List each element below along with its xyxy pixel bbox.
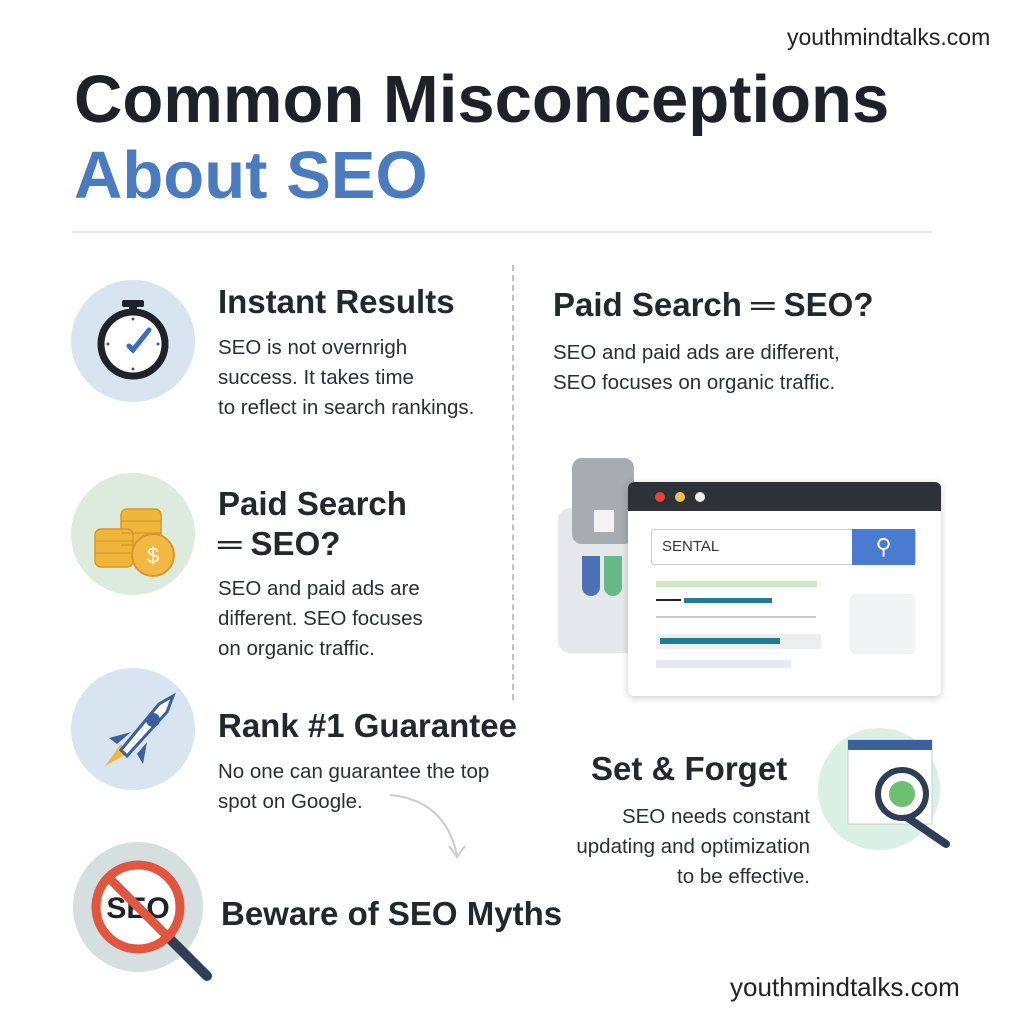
text: paid search left: Paid Search — [218, 485, 407, 522]
illustration: browser: SENTAL — [662, 538, 719, 555]
text: paid search right: SEO focuses on organic traffic. — [553, 371, 835, 394]
text: instant results: to reflect in search rankings. — [218, 396, 474, 419]
text: paid search left: ═ SEO? — [218, 525, 340, 562]
icon: magnifier gear — [818, 728, 940, 850]
illustration: browser — [558, 458, 944, 702]
title: Common Misconceptions — [74, 62, 889, 137]
brand bottom: youthmindtalks.com — [730, 972, 960, 1002]
text: instant results — [218, 283, 474, 419]
icon: rocket — [71, 668, 195, 790]
heading: beware: Beware of SEO Myths — [221, 895, 562, 932]
text: paid search right — [553, 286, 874, 394]
text: instant results: success. It takes time — [218, 366, 414, 389]
text: set & forget — [576, 750, 810, 888]
icon: no SEO: SEO — [106, 892, 170, 925]
text: rank guarantee — [218, 707, 517, 813]
text: rank guarantee: spot on Google. — [218, 790, 363, 813]
text: rank guarantee: No one can guarantee the top — [218, 760, 489, 783]
text: set & forget: Set & Forget — [591, 750, 787, 787]
icon: coins — [71, 473, 195, 595]
text: paid search left: SEO and paid ads are — [218, 577, 420, 600]
icon: coins: $ — [147, 543, 159, 568]
title — [74, 62, 889, 213]
text: paid search right: SEO and paid ads are different, — [553, 341, 840, 364]
illustration: browser: ⚲ — [875, 534, 892, 559]
arrow — [390, 794, 466, 858]
text: set & forget: updating and optimization — [576, 835, 810, 858]
text: rank guarantee: Rank #1 Guarantee — [218, 707, 517, 744]
text: paid search left — [218, 485, 423, 660]
title: About SEO — [74, 138, 428, 213]
icon: no SEO — [73, 842, 203, 972]
text: paid search right: Paid Search ═ SEO? — [553, 286, 874, 323]
text: paid search left: different. SEO focuses — [218, 607, 423, 630]
text: instant results: Instant Results — [218, 283, 455, 320]
icon: stopwatch — [71, 280, 195, 402]
text: set & forget: SEO needs constant — [622, 805, 810, 828]
text: set & forget: to be effective. — [677, 865, 810, 888]
brand top: youthmindtalks.com — [787, 24, 990, 50]
text: paid search left: on organic traffic. — [218, 637, 375, 660]
text: instant results: SEO is not overnrigh — [218, 336, 407, 359]
